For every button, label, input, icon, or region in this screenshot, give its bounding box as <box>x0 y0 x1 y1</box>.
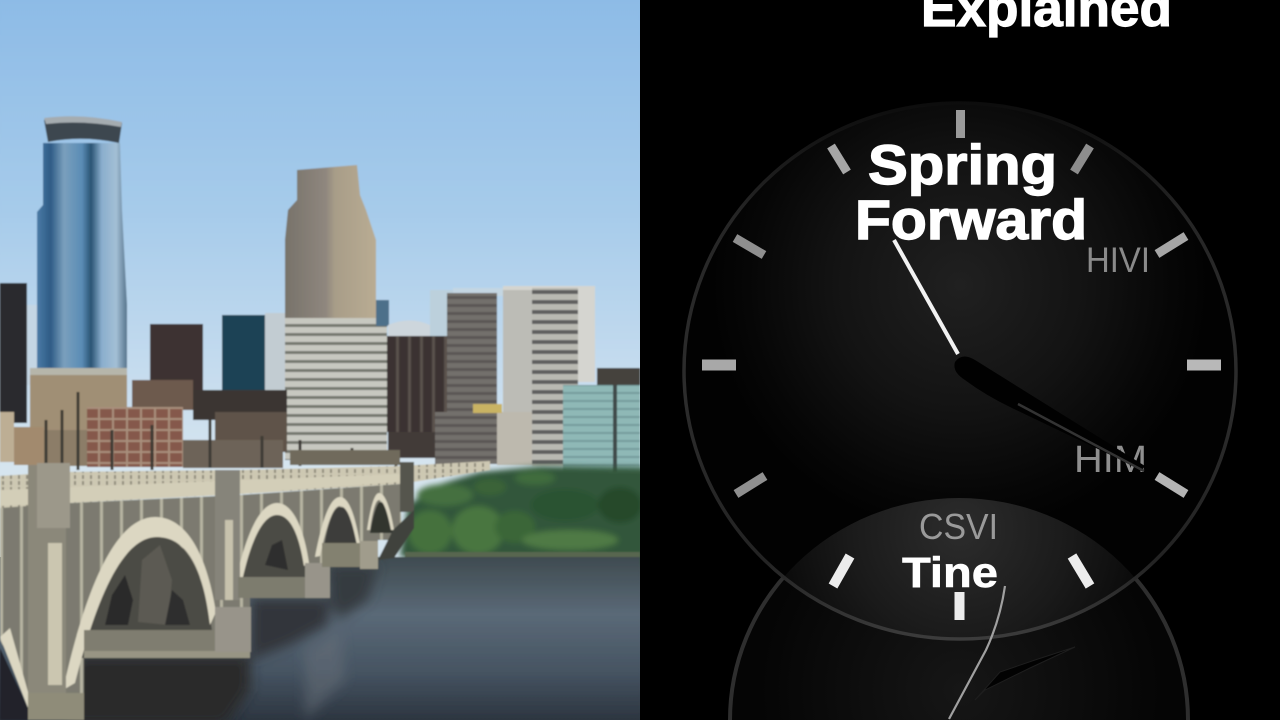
water <box>0 557 640 720</box>
panel: city photo <box>0 0 660 720</box>
label: HIVI upper: HIVI <box>1086 241 1150 280</box>
heading: Spring Forward <box>855 133 1087 251</box>
label: HIM lower: HIM <box>1074 439 1147 481</box>
lamp posts <box>46 392 396 470</box>
panel: dark clock panel <box>682 0 1238 720</box>
label: Tine: Tine <box>902 549 998 597</box>
small clock label CSVI: CSVI <box>919 506 998 547</box>
bridge <box>0 461 490 720</box>
bridge deck railing <box>0 461 490 508</box>
skyline <box>0 116 640 472</box>
arch bands <box>0 493 394 708</box>
small clock body <box>730 498 1188 720</box>
main clock <box>682 102 1238 641</box>
main clock ticks <box>702 110 1221 494</box>
river bank <box>405 552 640 557</box>
photo backdrop <box>0 0 640 720</box>
small clock ticks <box>833 556 1090 620</box>
overlap lens of the two clocks <box>786 498 1134 638</box>
small clock details <box>833 506 1090 719</box>
piers and base slabs <box>28 462 414 720</box>
arch interiors <box>78 502 393 658</box>
clock hands <box>894 240 1145 471</box>
small clock hands <box>949 586 1075 719</box>
spandrel wall <box>0 484 402 693</box>
heading: Spring Forward: Spring <box>868 133 1057 196</box>
trees <box>400 466 660 565</box>
heading: Spring Forward: Forward <box>855 188 1087 251</box>
photo contents <box>0 116 640 720</box>
